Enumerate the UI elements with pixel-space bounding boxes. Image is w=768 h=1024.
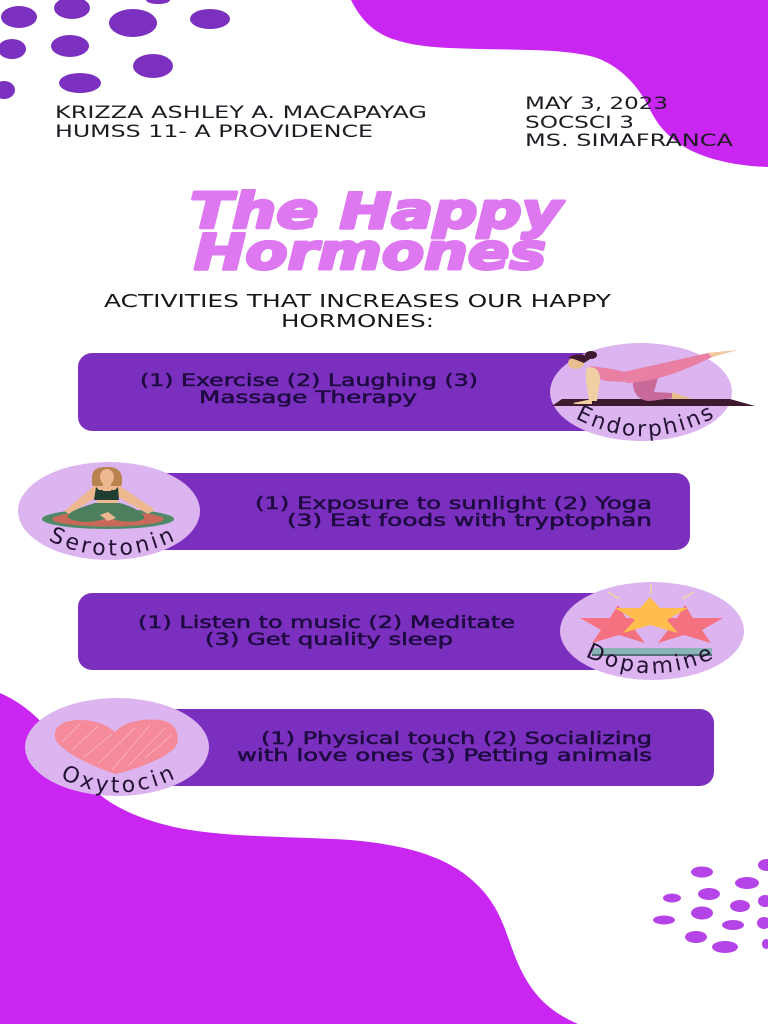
panel: serotonin <box>18 462 690 560</box>
title <box>190 183 565 281</box>
bottom left magenta blob <box>0 693 578 1024</box>
dopamine activities text <box>138 613 515 650</box>
dopamine circle <box>560 582 744 680</box>
icon: woman meditating on mat <box>42 467 174 529</box>
serotonin activities text: (1) Exposure to sunlight (2) Yoga <box>255 494 652 514</box>
icon: scribbled heart <box>55 720 178 774</box>
author block: HUMSS 11- A PROVIDENCE <box>55 122 373 141</box>
dopamine activities text: (1) Listen to music (2) Meditate <box>138 613 515 633</box>
oxytocin activities text <box>237 729 652 766</box>
title: Hormones <box>194 224 546 281</box>
author block <box>55 103 427 141</box>
icon: woman exercising on mat <box>552 350 755 406</box>
oxytocin activities text: with love ones (3) Petting animals <box>237 746 652 766</box>
serotonin bar <box>150 473 690 550</box>
date and class block: SOCSCI 3 <box>525 113 634 132</box>
top right magenta blob <box>351 0 768 167</box>
subtitle: HORMONES: <box>281 311 434 332</box>
endorphins bar <box>78 353 608 431</box>
serotonin label <box>50 527 174 556</box>
serotonin circle <box>18 462 200 560</box>
serotonin activities text: (3) Eat foods with tryptophan <box>287 511 652 531</box>
endorphins activities text <box>140 371 478 408</box>
endorphins circle <box>550 343 732 441</box>
icon: three stars on a podium <box>580 584 723 656</box>
subtitle <box>104 291 612 332</box>
serotonin label: Serotonin <box>50 527 174 556</box>
top left purple dots <box>0 0 230 99</box>
oxytocin circle <box>25 698 209 796</box>
subtitle: ACTIVITIES THAT INCREASES OUR HAPPY <box>104 291 612 312</box>
endorphins label: Endorphins <box>577 404 713 441</box>
dopamine activities text: (3) Get quality sleep <box>205 630 453 650</box>
panel: dopamine <box>78 582 744 680</box>
dopamine label: Dopamine <box>587 642 712 674</box>
author block: KRIZZA ASHLEY A. MACAPAYAG <box>55 103 427 122</box>
date and class block <box>525 94 734 150</box>
panel: endorphins <box>78 343 755 441</box>
panel: oxytocin <box>25 698 714 796</box>
endorphins activities text: Massage Therapy <box>199 388 417 408</box>
dopamine bar <box>78 593 608 670</box>
oxytocin bar <box>150 709 714 786</box>
oxytocin label: Oxytocin <box>63 766 174 796</box>
date and class block: MAY 3, 2023 <box>525 94 668 113</box>
date and class block: MS. SIMAFRANCA <box>525 131 734 150</box>
title: The Happy <box>190 183 565 240</box>
endorphins activities text: (1) Exercise (2) Laughing (3) <box>140 371 478 391</box>
oxytocin activities text: (1) Physical touch (2) Socializing <box>261 729 652 749</box>
serotonin activities text <box>255 494 652 531</box>
bottom right purple dots <box>653 859 768 953</box>
